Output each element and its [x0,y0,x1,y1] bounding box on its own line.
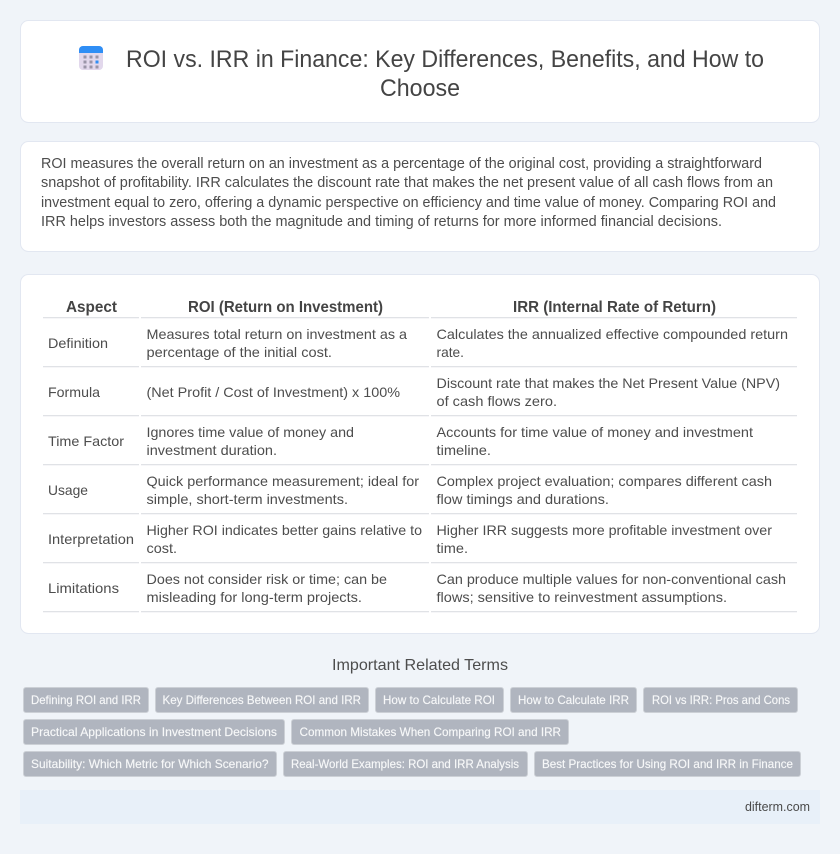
tag: How to Calculate ROI [383,693,495,707]
tag: Key Differences Between ROI and IRR [162,693,361,707]
table row: interpretation: Higher ROI indicates better gains relative to [146,522,422,538]
tag [644,688,798,712]
table row: definition: Definition [48,335,108,351]
tags: related terms [24,688,800,776]
text block: introduction paragraph: investment equal to zero, offering a dynamic perspective on efficiency and time value of money. Comparing ROI and [41,195,776,211]
table row: usage: simple, short-term investments. [146,491,348,507]
text block: introduction paragraph [41,156,776,230]
tag: Real-World Examples: ROI and IRR Analysis [291,757,519,771]
text block: introduction paragraph: ROI measures the overall return on an investment as a percentage of the original cost, providing a straightforward [41,156,762,172]
tag: Practical Applications in Investment Decisions [31,725,277,739]
tag [24,720,284,744]
tag: Defining ROI and IRR [31,693,141,707]
table row: limitations: Limitations [48,580,119,596]
panel: introduction [20,142,820,252]
table header row: ROI (Return on Investment) [188,299,383,316]
table row: definition: Calculates the annualized effective compounded return [436,326,788,342]
table row: time factor [48,424,753,458]
table row: limitations: flows; sensitive to reinvestment assumptions. [436,589,727,605]
table header row [66,299,716,316]
table row: time factor: investment duration. [146,442,277,458]
table row: interpretation: time. [436,540,468,556]
table row: definition: rate. [436,344,464,360]
table row: definition: percentage of the initial cost. [146,344,332,360]
table row: interpretation: cost. [146,540,177,556]
table row: usage: flow timings and durations. [436,491,609,507]
tag: Common Mistakes When Comparing ROI and IRR [300,725,561,739]
table row: limitations: Does not consider risk or time; can be [146,571,387,587]
table row: limitations [48,571,786,605]
tag [24,688,148,712]
table row: usage [48,473,772,507]
text block: introduction paragraph: snapshot of profitability. IRR calculates the discount rate that makes the net present value of all cash flows from an [41,175,773,191]
table row: time factor: timeline. [436,442,491,458]
tag [24,752,276,776]
table row: time factor: Ignores time value of money and [146,424,354,440]
table row: limitations: Can produce multiple values for non-conventional cash [436,571,786,587]
tag: Best Practices for Using ROI and IRR in Finance [542,757,793,771]
table header row: IRR (Internal Rate of Return) [513,299,716,316]
table row: formula: (Net Profit / Cost of Investment) x 100% [146,384,400,400]
footer [20,790,820,824]
heading: page title: Choose [380,75,460,102]
heading: page title: ROI vs. IRR in Finance: Key Differences, Benefits, and How to [126,46,764,73]
text block: introduction paragraph: IRR helps investors assess both the magnitude and timing of returns for more informed financial decisions. [41,214,722,230]
heading: page title [126,46,764,102]
table row: interpretation [48,522,772,556]
tag [156,688,368,712]
table row: definition: Measures total return on investment as a [146,326,407,342]
tag [376,688,504,712]
table row: formula: Discount rate that makes the Net Present Value (NPV) [436,375,780,391]
tag [292,720,568,744]
table row: limitations: misleading for long-term projects. [146,589,362,605]
table row: interpretation: Higher IRR suggests more profitable investment over [436,522,772,538]
table row: formula: of cash flows zero. [436,393,557,409]
heading: important related terms: Important Related Terms [332,657,508,674]
table row: usage: Usage [48,482,88,498]
icon: calendar [79,46,103,70]
panel: title header [20,20,820,122]
tag [284,752,528,776]
table row: formula: Formula [48,384,100,400]
footer: difterm.com [745,800,810,814]
table header row: Aspect [66,299,118,316]
panel: comparison table [20,274,820,634]
table row: time factor: Time Factor [48,433,124,449]
tag: How to Calculate IRR [518,693,629,707]
table row: interpretation: Interpretation [48,531,134,547]
tag: Suitability: Which Metric for Which Scenario? [31,757,269,771]
tag [534,752,800,776]
table row: usage: Quick performance measurement; ideal for [146,473,419,489]
table row: time factor: Accounts for time value of money and investment [436,424,753,440]
table row: formula [48,375,780,409]
tag: ROI vs IRR: Pros and Cons [652,693,790,707]
table row: usage: Complex project evaluation; compares different cash [436,473,772,489]
table row: definition [48,326,788,360]
tag [510,688,636,712]
